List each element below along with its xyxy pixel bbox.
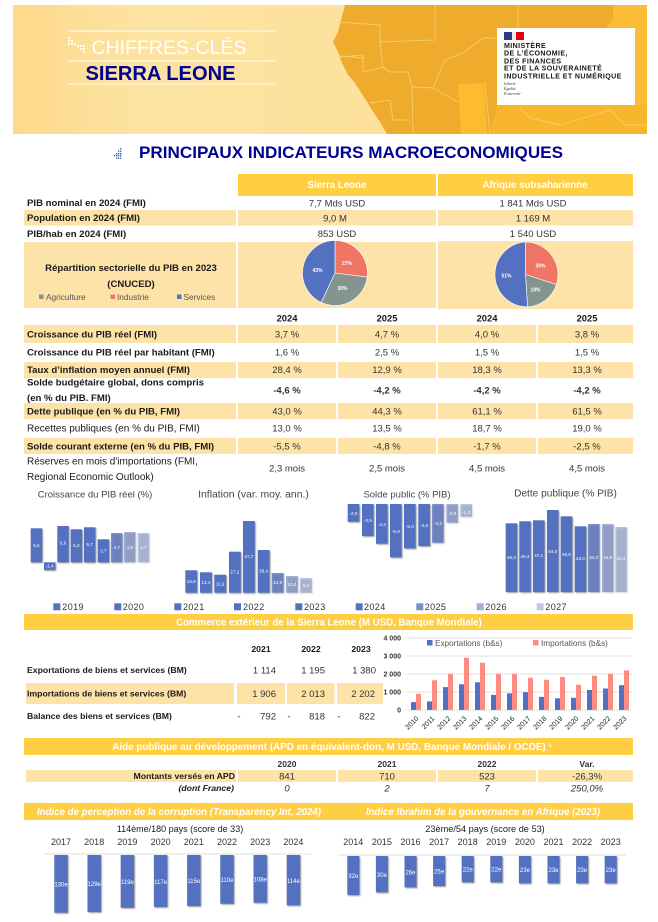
pie chart: Sierra Leone: 27%: [342, 261, 353, 267]
year labels: 2015: [484, 715, 500, 731]
row: dont France: 7: [484, 784, 490, 794]
bar chart: public debt: 47,1: [534, 553, 544, 558]
ministry name: ET DE LA SOUVERAINETÉ: [504, 64, 602, 73]
bar chart: corruption index: 2019: [117, 837, 137, 847]
legend: years: 2022: [243, 602, 265, 612]
row: APD: Montants versés en APD: [133, 771, 235, 781]
bar chart: growth: 5,5: [33, 543, 40, 548]
row: inflation: 12,9 %: [372, 365, 402, 376]
sector title: [45, 263, 217, 290]
pie chart: Africa: 19%: [530, 288, 541, 294]
year labels: 2021: [580, 715, 596, 731]
bar chart: public debt: 49,9: [562, 552, 571, 557]
bar chart: Ibrahim index: 32e: [348, 874, 359, 880]
bar chart: corruption index: 117e: [154, 880, 168, 886]
bar chart: corruption index: 2017: [51, 837, 71, 847]
year headers: [251, 644, 371, 654]
icon: French flag: [504, 32, 524, 40]
legend: years: 2021: [183, 602, 205, 612]
motto: Liberté: [503, 81, 516, 86]
chart legend: Importations (b&s): [541, 639, 608, 648]
row: recettes: 18,7 %: [472, 424, 502, 434]
exports bars: [411, 682, 624, 710]
row: inflation: Taux d’inflation moyen annuel (FMI): [27, 365, 190, 376]
row: PIB nominal: 1 841 Mds USD: [499, 198, 567, 210]
row: exports: Exportations de biens et services (BM): [27, 665, 187, 675]
section headers: governance: Indice Ibrahim de la gouvernance en Afrique (2023): [366, 807, 600, 818]
bar chart: public debt: [506, 488, 627, 592]
section header: aid: [24, 738, 633, 755]
bar chart: public debt: 46,4: [521, 554, 530, 559]
year headers: 2025: [377, 312, 397, 324]
row: imports: 1 906: [252, 689, 276, 700]
row: population: 9,0 M: [323, 214, 347, 224]
row: solde budgétaire: -4,6 %: [273, 386, 301, 396]
row: croissance par habitant: 1,6 %: [275, 348, 300, 358]
bar chart: inflation: 27,2: [230, 570, 240, 574]
sector legend: Industrie: [117, 292, 149, 302]
row: recettes: 13,5 %: [372, 424, 402, 434]
row: PIB par habitant: PIB/hab en 2024 (FMI): [27, 229, 126, 240]
year labels: 2019: [548, 715, 564, 731]
icon: dotted arrow: [68, 37, 85, 53]
row: imports: 2 202: [351, 689, 375, 700]
row: croissance: 4,0 %: [475, 330, 500, 340]
row: réserves: 4,5 mois: [569, 464, 605, 474]
row: exports: 1 380: [352, 666, 376, 676]
ministry name: [504, 41, 622, 80]
bar chart: corruption index: 108e: [254, 878, 268, 884]
row: croissance: 4,7 %: [375, 330, 400, 340]
banner title: CHIFFRES-CLÉS: [92, 36, 246, 59]
row: APD: 710: [379, 772, 395, 782]
sector title: (CNUCED): [107, 279, 155, 290]
bar chart: Ibrahim index: 2021: [543, 837, 564, 847]
section headers: governance: Indice de perception de la corruption (Transparency Int, 2024): [37, 807, 321, 818]
bar chart: growth: 3,7: [100, 548, 107, 554]
sector legend: Services: [184, 292, 215, 302]
pie chart: Africa: 30%: [535, 264, 546, 270]
row: dont France: [178, 783, 604, 794]
bar chart: growth: 4,9: [127, 545, 133, 550]
row: exports: [27, 665, 376, 676]
bar chart: public debt: 44,3: [589, 555, 599, 560]
year headers: 2021: [378, 759, 397, 769]
panel: sector breakdown: [24, 240, 633, 309]
motto: Égalité: [503, 86, 516, 91]
row: croissance: [24, 325, 633, 343]
ministry name: DES FINANCES: [504, 58, 562, 65]
year labels: 2014: [468, 715, 484, 731]
bar chart: Ibrahim index: 2016: [400, 837, 421, 847]
bar chart: inflation: 12,9: [273, 580, 283, 585]
row: solde budgétaire: [27, 378, 601, 404]
bar chart: Ibrahim index: 2018: [458, 837, 478, 847]
table: trade: [26, 644, 383, 722]
section header: trade: Commerce extérieur de la Sierra Leone (M USD, Banque Mondiale): [176, 618, 482, 628]
bar chart: exports and imports: 4 000: [383, 636, 401, 642]
bar chart: inflation: 28,4: [259, 568, 269, 574]
row: dette: 44,3 %: [372, 406, 402, 418]
row: solde budgétaire: -4,2 %: [473, 386, 501, 396]
legend: years: 2027: [545, 602, 567, 612]
section header: aid: Aide publique au développement (APD en équivalent-don, M USD, Banque Mondiale / OCDE) ¹: [112, 742, 552, 753]
bar chart: exports and imports: 0: [397, 708, 401, 714]
row: dette: 61,5 %: [572, 406, 602, 418]
bar chart: public balance: -2,0: [448, 511, 456, 516]
pie chart: Sierra Leone: [302, 240, 367, 306]
bar chart: inflation: 11,9: [216, 582, 225, 586]
year labels: 2020: [564, 715, 580, 731]
row: solde courant: [24, 438, 633, 454]
year headers: 2024: [277, 312, 298, 324]
bar chart: Ibrahim index: 23ème/54 pays (score de 53): [425, 824, 545, 834]
bar chart: Ibrahim index: 2015: [372, 837, 392, 847]
year labels: 2010: [404, 715, 420, 731]
year labels: 2016: [500, 715, 516, 731]
row: imports: [26, 683, 383, 704]
row: solde courant: -5,5 %: [273, 442, 301, 452]
motto: Fraternité: [503, 91, 521, 96]
row: dont France: 250,0%: [570, 784, 604, 794]
bar chart: Ibrahim index: 2017: [429, 837, 449, 847]
bar chart: Ibrahim index: 30e: [377, 873, 388, 879]
row: PIB nominal: 7,7 Mds USD: [309, 198, 365, 210]
bar chart: public debt: Dette publique (% PIB): [514, 488, 617, 500]
bar chart: Ibrahim index: [339, 824, 626, 895]
year labels: 2013: [452, 715, 468, 731]
title lines: [68, 31, 277, 84]
bar chart: corruption index: 114ème/180 pays (score de 33): [117, 824, 243, 834]
pie chart: Africa: [495, 242, 558, 307]
year labels: 2023: [612, 715, 628, 731]
bar chart: Ibrahim index: 26e: [405, 870, 416, 876]
year headers: 2022: [478, 759, 497, 769]
sector title: Répartition sectorielle du PIB en 2023: [45, 263, 217, 274]
row: balance: 792: [260, 712, 276, 722]
bar chart: corruption index: 2021: [184, 837, 204, 847]
legend: years: 2019: [62, 602, 84, 612]
year labels: 2022: [596, 715, 612, 731]
bar chart: public balance: -4,2: [434, 521, 442, 526]
bar chart: corruption index: 114e: [287, 879, 301, 885]
year headers: 2025: [577, 312, 597, 324]
bar chart: corruption index: 119e: [121, 880, 135, 886]
legend: years: 2024: [364, 602, 386, 612]
row: réserves: Regional Economic Outlook): [27, 472, 154, 483]
sector legend: Agriculture: [46, 292, 86, 302]
row: réserves: Réserves en mois d'importations (FMI,: [27, 456, 198, 468]
bar chart: inflation: 10,4: [287, 582, 297, 587]
row: inflation: 18,3 %: [472, 365, 502, 376]
row: APD: 523: [479, 772, 495, 782]
bar chart: Ibrahim index: 2014: [343, 837, 363, 847]
section headers: governance: [24, 803, 633, 820]
bar chart: Ibrahim index: 22e: [463, 868, 473, 874]
row: exports: 1 114: [253, 666, 276, 676]
row: inflation: 28,4 %: [272, 365, 302, 376]
row: dont France: 0: [284, 784, 290, 794]
row: croissance par habitant: 1,5 %: [575, 348, 600, 358]
bar chart: exports and imports: 2 000: [383, 672, 401, 678]
row: balance: -: [287, 712, 291, 722]
row: PIB par habitant: 853 USD: [318, 229, 356, 240]
bar chart: corruption index: 2024: [283, 837, 303, 847]
bar chart: public debt: 43,0: [576, 556, 585, 561]
ministry name: DE L'ÉCONOMIE,: [504, 49, 568, 58]
bar chart: growth: 4,7: [114, 545, 120, 550]
legend: years: 2026: [485, 602, 507, 612]
section heading: [114, 143, 563, 162]
bar chart: Ibrahim index: 25e: [434, 870, 445, 876]
row: solde courant: Solde courant externe (en % du PIB, FMI): [27, 442, 214, 452]
bar chart: Ibrahim index: 2022: [572, 837, 592, 847]
header banner: [13, 5, 647, 134]
year headers: Var.: [579, 759, 595, 769]
row: inflation: [24, 362, 633, 378]
map of West Africa: [333, 5, 647, 134]
year headers: 2022: [301, 644, 321, 654]
row: solde courant: -4,8 %: [373, 442, 401, 452]
pie chart: Sierra Leone: 30%: [337, 286, 348, 292]
row: solde courant: -1,7 %: [473, 442, 501, 452]
bar chart: public balance: -4,3: [378, 522, 386, 527]
year headers: 2020: [278, 759, 297, 769]
country name: SIERRA LEONE: [86, 63, 236, 85]
column headers: Sierra Leone: [308, 180, 367, 191]
row: population: 1 169 M: [516, 214, 550, 224]
table: aid: [26, 759, 633, 794]
row: recettes: [27, 424, 602, 434]
bar chart: public balance: -2,0: [350, 511, 358, 516]
bar chart: public balance: -5,9: [392, 529, 400, 534]
section header: trade: [24, 614, 633, 630]
row: APD: [26, 770, 633, 782]
bar chart: Ibrahim index: 2019: [486, 837, 506, 847]
sector legend: [39, 292, 215, 302]
row: réserves: 2,3 mois: [269, 464, 305, 474]
bar chart: exports and imports: [383, 636, 632, 731]
bar chart: corruption index: 130e: [54, 882, 68, 888]
row: balance: -: [237, 712, 241, 722]
bar chart: growth: 5,9: [60, 540, 67, 546]
row: réserves: 4,5 mois: [469, 464, 505, 474]
row: balance: [27, 711, 375, 722]
legend: years: 2023: [304, 602, 326, 612]
bar chart: corruption index: 2023: [250, 837, 270, 847]
row: exports: 1 195: [301, 666, 325, 676]
bar chart: corruption index: 129e: [88, 882, 102, 888]
chart legend: Exportations (b&s): [435, 639, 503, 648]
row: croissance par habitant: [27, 348, 600, 358]
row: croissance par habitant: 1,5 %: [475, 348, 500, 358]
row: dont France: (dont France): [178, 783, 234, 793]
chart legend: [427, 639, 608, 648]
bar chart: public balance: -4,6: [420, 523, 428, 528]
row: recettes: Recettes publiques (en % du PIB, FMI): [27, 424, 200, 434]
bar chart: inflation: Inflation (var. moy. ann.): [198, 490, 309, 500]
ministry name: MINISTÈRE: [504, 41, 546, 50]
year headers: [278, 759, 595, 769]
bar chart: public balance: [348, 490, 472, 557]
row: dette: Dette publique (en % du PIB, FMI): [27, 406, 180, 418]
row: population: Population en 2024 (FMI): [27, 213, 140, 224]
heading text: PRINCIPAUX INDICATEURS MACROECONOMIQUES: [139, 143, 563, 162]
motto: [503, 81, 521, 96]
year labels: 2012: [436, 715, 452, 731]
bar chart: corruption index: 2020: [151, 837, 171, 847]
row: balance: 822: [359, 712, 375, 722]
year headers: 2024: [477, 312, 498, 324]
year headers: [277, 312, 597, 324]
row: balance: 818: [309, 712, 325, 722]
year labels: [404, 715, 628, 731]
bar chart: corruption index: 110e: [221, 878, 234, 884]
ministry name: INDUSTRIELLE ET NUMÉRIQUE: [504, 71, 622, 80]
legend: years: 2020: [123, 602, 144, 612]
year headers: 2021: [251, 644, 271, 654]
row: croissance par habitant: 2,5 %: [375, 348, 400, 358]
row: population: [24, 210, 633, 226]
bar chart: public balance: -1,3: [462, 510, 470, 515]
year labels: 2018: [532, 715, 548, 731]
bar chart: growth: -1,4: [46, 564, 54, 568]
bar chart: exports and imports: 3 000: [383, 654, 401, 660]
imports bars: [416, 658, 629, 710]
column headers: Afrique subsaharienne: [483, 180, 588, 191]
icon: dotted arrow: [114, 148, 121, 159]
legend: years: 2025: [425, 602, 446, 612]
row: solde budgétaire: Solde budgétaire global, dons compris: [27, 378, 204, 388]
row: recettes: 19,0 %: [572, 424, 602, 434]
row: inflation: 13,3 %: [572, 365, 602, 376]
row: recettes: 13,0 %: [272, 424, 302, 434]
pie chart: Africa: 51%: [501, 274, 512, 280]
year labels: 2011: [421, 715, 436, 731]
row: dont France: 2: [383, 784, 390, 794]
bar chart: corruption index: 2022: [217, 837, 237, 847]
bar chart: inflation: 13,4: [201, 580, 211, 585]
row: PIB nominal: [27, 198, 567, 210]
row: réserves: 2,5 mois: [369, 464, 405, 474]
pie chart: Sierra Leone: 43%: [312, 268, 323, 274]
row: imports: 2 013: [301, 689, 325, 700]
row: croissance par habitant: Croissance du PIB réel par habitant (FMI): [27, 348, 215, 358]
bar chart: Ibrahim index: 22e: [491, 868, 502, 874]
bar chart: Ibrahim index: 23e: [606, 868, 616, 874]
row: balance: Balance des biens et services (BM): [27, 711, 172, 721]
bar chart: inflation: 47,7: [244, 554, 254, 559]
row: PIB par habitant: [27, 229, 556, 240]
row: dette: 43,0 %: [272, 406, 302, 418]
bar chart: growth: 5,7: [87, 542, 93, 547]
bar chart: public balance: -5,0: [406, 524, 414, 529]
bar chart: public debt: 54,0: [548, 549, 558, 554]
bar chart: public debt: 42,4: [617, 556, 626, 561]
row: PIB par habitant: 1 540 USD: [510, 229, 556, 240]
bar chart: exports and imports: 1 000: [383, 690, 401, 696]
bar chart: Ibrahim index: 2023: [601, 837, 621, 847]
year headers: 2023: [351, 644, 371, 654]
bar chart: growth: 4,7: [140, 545, 147, 550]
bar chart: growth: [31, 490, 152, 570]
row: solde courant: -2,5 %: [573, 442, 601, 452]
bar chart: public debt: 44,6: [603, 555, 613, 560]
bar chart: Ibrahim index: 23e: [577, 868, 588, 874]
bar chart: inflation: 14,8: [187, 579, 196, 584]
row: réserves: [27, 456, 605, 483]
bar chart: public balance: Solde public (% PIB): [363, 490, 451, 500]
legend: years: [53, 602, 567, 612]
bar chart: Ibrahim index: 2020: [515, 837, 535, 847]
row: croissance: 3,8 %: [575, 330, 600, 340]
bar chart: corruption index: 2018: [84, 837, 104, 847]
bar chart: growth: 5,3: [73, 543, 80, 548]
row: croissance: Croissance du PIB réel (FMI): [27, 330, 157, 340]
bar chart: corruption index: [44, 824, 311, 913]
bar chart: growth: Croissance du PIB réel (%): [38, 490, 152, 500]
bar chart: public debt: 45,3: [507, 555, 516, 560]
row: dette: 61,1 %: [472, 406, 502, 418]
row: imports: Importations de biens et services (BM): [27, 688, 186, 698]
year labels: 2017: [516, 715, 532, 731]
column headers: [238, 174, 633, 196]
bar chart: inflation: [185, 490, 312, 593]
row: solde budgétaire: (en % du PIB. FMI): [27, 393, 111, 404]
row: dette: [24, 403, 633, 419]
bar chart: inflation: 9,2: [303, 583, 310, 588]
ministry logo: [497, 28, 635, 105]
row: balance: -: [337, 712, 341, 722]
bar chart: corruption index: 115e: [187, 879, 201, 885]
row: APD: 841: [279, 772, 295, 782]
row: croissance: 3,7 %: [275, 330, 300, 340]
row: solde budgétaire: -4,2 %: [573, 386, 601, 396]
bar chart: Ibrahim index: 23e: [548, 868, 559, 874]
row: PIB nominal: PIB nominal en 2024 (FMI): [27, 198, 146, 209]
table: main indicators: [24, 174, 633, 483]
bar chart: public balance: -3,5: [364, 518, 372, 523]
row: solde budgétaire: -4,2 %: [373, 386, 401, 396]
row: APD: -26,3%: [572, 772, 603, 782]
bar chart: Ibrahim index: 23e: [520, 868, 531, 874]
